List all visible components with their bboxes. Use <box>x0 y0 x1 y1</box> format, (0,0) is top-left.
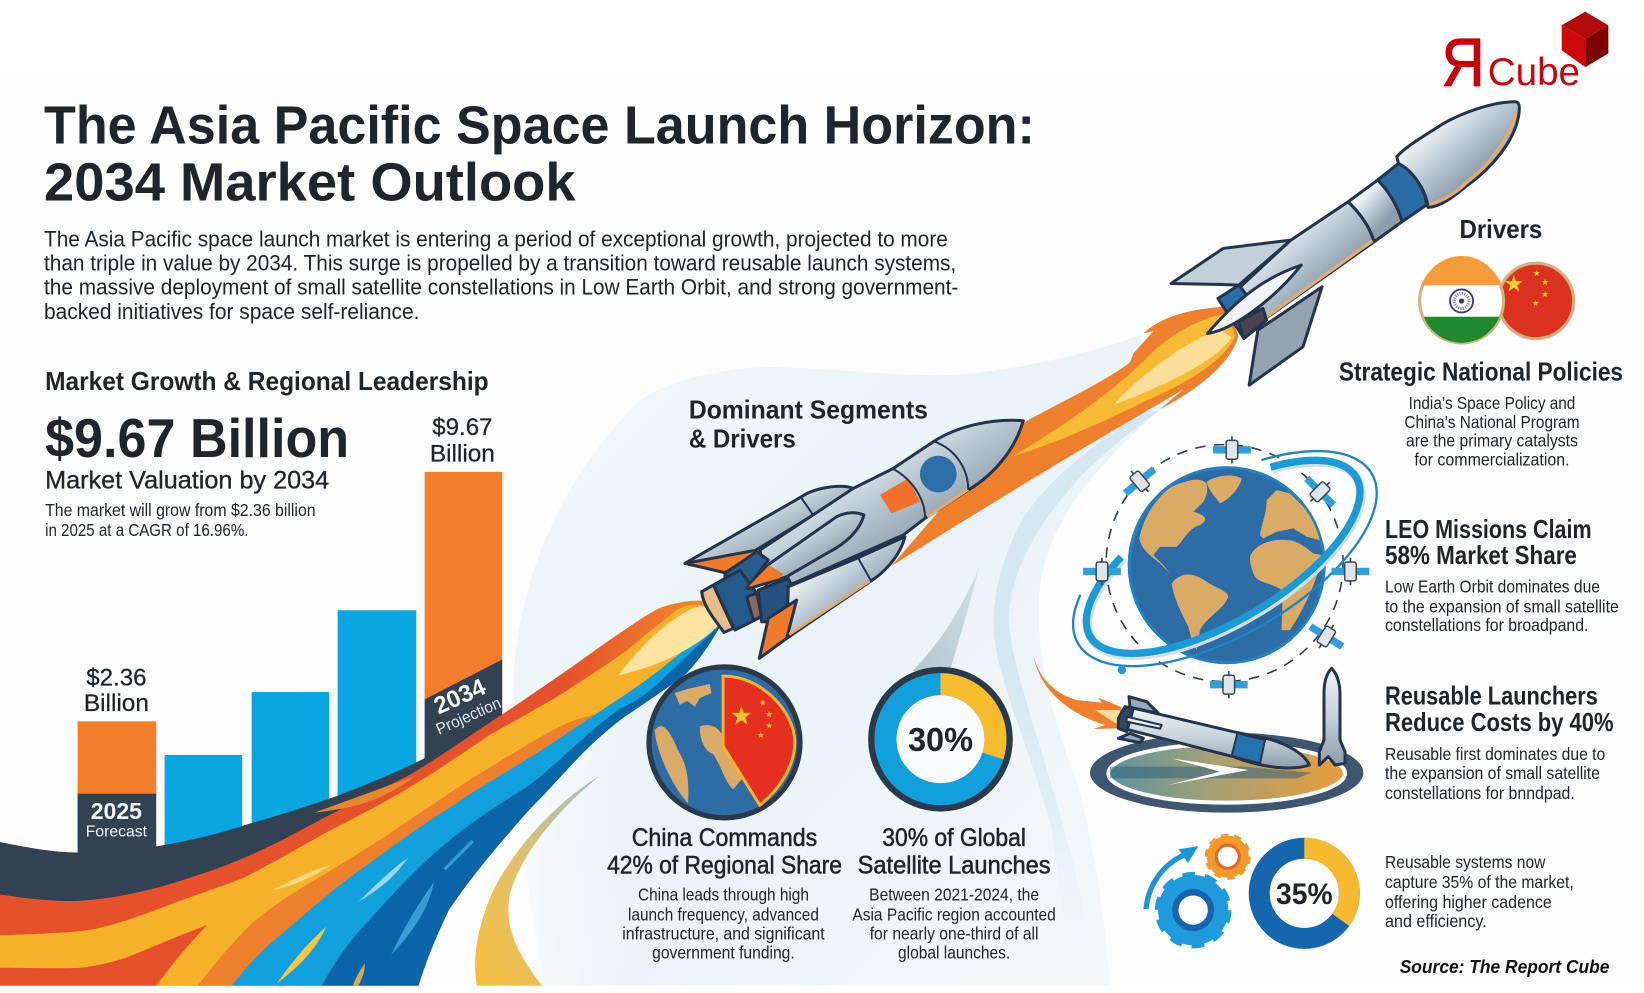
text: reusable systems: Reusable systems now <box>1385 852 1546 872</box>
text: China: government funding. <box>652 942 795 962</box>
intro paragraph <box>44 226 958 324</box>
bar caption: 2025 forecast <box>86 798 148 841</box>
top fin <box>685 551 757 573</box>
text: strategic policies <box>1404 393 1580 470</box>
middle booster tail <box>748 565 783 587</box>
logo: Я <box>1442 25 1485 101</box>
lower booster <box>787 537 905 638</box>
orbit rings <box>1044 416 1410 710</box>
small center fin <box>1207 265 1301 333</box>
landing rocket fins <box>1118 697 1158 743</box>
title: The Asia Pacific Space Launch Horizon: <box>44 97 1035 156</box>
logo: Cube <box>1488 51 1580 94</box>
landing rocket engine <box>1118 707 1133 732</box>
flags: India and China <box>1420 256 1574 343</box>
exhaust flame <box>1033 655 1122 729</box>
intro paragraph: The Asia Pacific space launch market is entering a period of exceptional growth, projected to more <box>44 226 948 251</box>
text: reusable systems: and efficiency. <box>1385 911 1487 931</box>
bar label: 2034 value <box>430 414 495 467</box>
engine <box>1218 285 1267 338</box>
bar chart <box>78 472 502 860</box>
intro paragraph: the massive deployment of small satellite constellations in Low Earth Orbit, and strong government- <box>44 275 958 300</box>
flag stars <box>730 698 773 740</box>
flag stars: ★ <box>730 701 753 731</box>
pad surface <box>1108 744 1345 803</box>
text: China: China leads through high <box>638 885 809 905</box>
icon: gears with arrow <box>1146 837 1248 943</box>
flame trail between rockets <box>891 307 1238 566</box>
flame core <box>1095 710 1120 725</box>
top booster <box>685 486 853 572</box>
growth note <box>45 500 316 540</box>
pale blue background swoosh <box>472 336 1173 993</box>
continents <box>655 684 746 803</box>
flag stars: ★ <box>759 698 767 708</box>
big number: $9.67 Billion <box>45 408 349 469</box>
standing rocket <box>1319 668 1345 765</box>
rocket: central launcher <box>685 420 1023 658</box>
growth note: The market will grow from $2.36 billion <box>45 500 316 520</box>
text: global launches: Between 2021-2024, the <box>869 885 1039 905</box>
heading: China commands <box>607 825 842 879</box>
grey swoosh behind donut <box>912 567 979 671</box>
heading: global satellite launches: 30% of Global <box>882 825 1026 852</box>
text: reusable: the expansion of small satellite <box>1385 763 1600 783</box>
heading: LEO missions: 58% Market Share <box>1385 540 1577 570</box>
donut: 30%: 30% <box>908 722 973 759</box>
engine collar <box>747 593 762 620</box>
core stage <box>760 420 1023 587</box>
source credit: Source: The Report Cube <box>1400 956 1609 977</box>
text: LEO: to the expansion of small satellite <box>1385 596 1619 616</box>
heading: global satellite launches: Satellite Launches <box>858 852 1051 879</box>
heading: global satellite launches <box>858 825 1051 879</box>
landing rocket band <box>1232 733 1265 763</box>
lower engine <box>758 578 797 622</box>
lower shading strips <box>789 489 968 634</box>
donut: 30% <box>868 667 1013 812</box>
bar caption: 2025 forecast: Forecast <box>86 824 148 841</box>
icon: China share globe <box>649 667 800 818</box>
heading: dominant segments <box>689 394 928 454</box>
flags: India and China: ★ <box>1533 268 1540 278</box>
text: China: launch frequency, advanced <box>628 905 819 925</box>
flag sector <box>723 676 795 805</box>
text: global launches: Asia Pacific region accounted <box>852 905 1056 925</box>
nozzle ring <box>702 585 733 632</box>
pad shadow <box>1110 767 1312 778</box>
yellow swoosh <box>475 776 600 986</box>
nose cone <box>1397 102 1519 207</box>
text: global launches: global launches. <box>898 942 1010 962</box>
bar label: 2034 value: $9.67 <box>432 414 493 441</box>
text: reusable systems: offering higher cadence <box>1385 892 1552 912</box>
bar caption: 2034 projection <box>423 670 504 739</box>
text: LEO: Low Earth Orbit dominates due <box>1385 576 1600 596</box>
bar label: 2025 value <box>84 665 149 717</box>
flags: India and China: ★ <box>1541 277 1549 287</box>
heading: China commands: China Commands <box>632 825 817 852</box>
growth note: in 2025 at a CAGR of 16.96%. <box>45 520 248 540</box>
heading: dominant segments: & Drivers <box>689 424 796 454</box>
donut: 35%: 35% <box>1276 878 1333 911</box>
bar caption: 2025 forecast: 2025 <box>91 798 142 824</box>
bar caption: 2034 projection: 2034 <box>430 673 490 720</box>
mid stage <box>1348 180 1402 242</box>
bar label: 2034 value: Billion <box>430 440 495 467</box>
porthole <box>920 456 957 492</box>
section heading: market growth: Market Growth & Regional Leadership <box>45 366 489 396</box>
subheading: market valuation: Market Valuation by 2034 <box>45 467 329 495</box>
middle booster <box>747 513 864 588</box>
intro paragraph: backed initiatives for space self-reliance. <box>44 299 419 324</box>
earth with orbits and satellites <box>1072 436 1378 698</box>
lower body <box>1240 202 1374 320</box>
bottom fin <box>1249 287 1322 385</box>
bar caption: 2034 projection: Projection <box>433 694 504 739</box>
upper engine <box>725 552 768 588</box>
stage seams <box>802 442 968 582</box>
text: strategic policies: China’s National Program <box>1404 412 1580 432</box>
pad <box>1090 733 1363 813</box>
text: global launches <box>852 885 1056 962</box>
landing pad with reusable rockets <box>1033 655 1363 813</box>
heading: LEO missions: LEO Missions Claim <box>1385 514 1592 544</box>
rocket detail strip <box>1127 717 1162 729</box>
text: reusable <box>1385 744 1605 803</box>
logo <box>1442 12 1608 101</box>
heading: dominant segments: Dominant Segments <box>689 394 928 424</box>
heading: LEO missions <box>1385 514 1592 570</box>
lower fin <box>759 600 797 658</box>
flags: India and China: ★ <box>1532 298 1539 308</box>
title: 2034 Market Outlook <box>44 153 576 212</box>
bar label: 2025 value: Billion <box>84 690 149 717</box>
text: China: infrastructure, and significant <box>622 923 825 943</box>
lower shading strips <box>1267 113 1516 317</box>
pad arrow <box>1168 758 1248 785</box>
globe <box>1129 468 1324 663</box>
text: strategic policies: India’s Space Policy and <box>1409 393 1575 413</box>
flag stars: ★ <box>765 721 773 731</box>
orange panel <box>880 478 920 513</box>
text: LEO: constellations for broadpand. <box>1385 615 1588 635</box>
drivers heading: Drivers <box>1459 214 1542 244</box>
heading: China commands: 42% of Regional Share <box>607 852 842 879</box>
continents <box>1139 476 1322 650</box>
text: China <box>622 885 825 962</box>
text: strategic policies: are the primary catalysts <box>1406 431 1578 451</box>
blue band <box>1378 163 1426 222</box>
text: LEO <box>1385 576 1619 635</box>
text: reusable: constellations for bnndpad. <box>1385 783 1575 803</box>
flag stars: ★ <box>765 709 773 719</box>
intro paragraph: than triple in value by 2034. This surge is propelled by a transition toward reusable launch systems, <box>44 251 956 276</box>
heading: reusable launchers: Reusable Launchers <box>1385 681 1598 711</box>
text: reusable systems <box>1385 852 1574 931</box>
flags: India and China: ★ <box>1541 289 1549 299</box>
central engine <box>713 570 762 630</box>
top fin <box>1171 240 1291 285</box>
engine base <box>1239 308 1267 338</box>
landing rocket body <box>1127 707 1309 768</box>
text: strategic policies: for commercialization. <box>1414 450 1570 470</box>
text: reusable systems: capture 35% of the market, <box>1385 872 1574 892</box>
rocket: upper launcher <box>1171 102 1519 385</box>
text: reusable: Reusable first dominates due to <box>1385 744 1605 764</box>
flag stars: ★ <box>757 730 765 740</box>
heading: reusable launchers <box>1385 681 1614 737</box>
text: global launches: for nearly one-third of all <box>870 923 1039 943</box>
dashed orbit <box>1106 445 1343 682</box>
flame core of central rocket <box>619 606 720 675</box>
flame stream <box>0 601 721 993</box>
donut: 35% <box>1259 848 1349 938</box>
satellites <box>1083 436 1369 698</box>
title <box>44 97 1035 212</box>
flags: India and China: ★ <box>1504 271 1524 297</box>
bar label: 2025 value: $2.36 <box>86 665 147 692</box>
